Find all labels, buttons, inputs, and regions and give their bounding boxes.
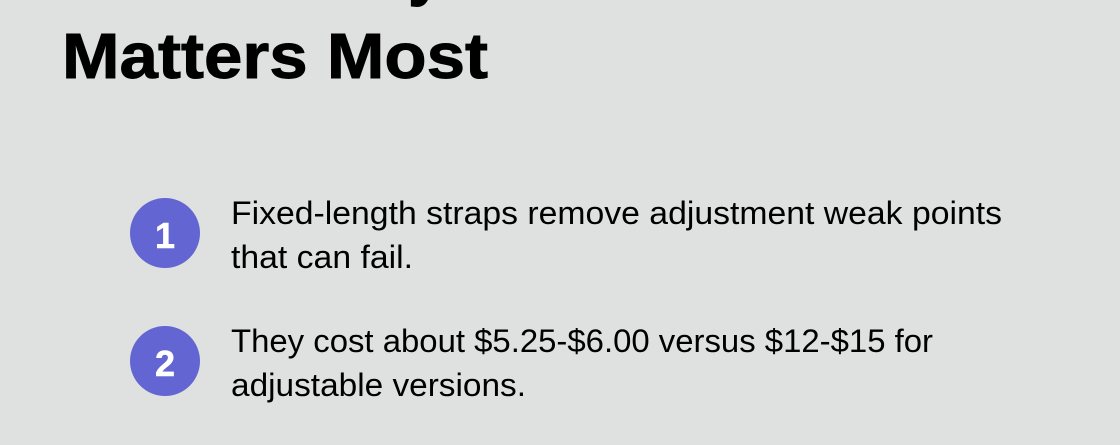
item 2 text (231, 323, 933, 403)
item 2 text: adjustable versions. (231, 367, 526, 403)
number badge 2: 2 (155, 343, 175, 384)
item 1 text: Fixed-length straps remove adjustment weak points (231, 195, 1002, 231)
number badge 2 (130, 326, 200, 396)
number badge 1 (130, 198, 200, 268)
item 1 text (231, 195, 1002, 275)
heading: second line: Matters Most (62, 20, 488, 92)
item 1 text: that can fail. (231, 239, 413, 275)
list item 1 (130, 195, 1002, 275)
item 2 text: They cost about $5.25-$6.00 versus $12-$15 for (231, 323, 933, 359)
list item 2 (130, 323, 933, 403)
number badge 1: 1 (155, 215, 175, 256)
heading (62, 0, 488, 92)
